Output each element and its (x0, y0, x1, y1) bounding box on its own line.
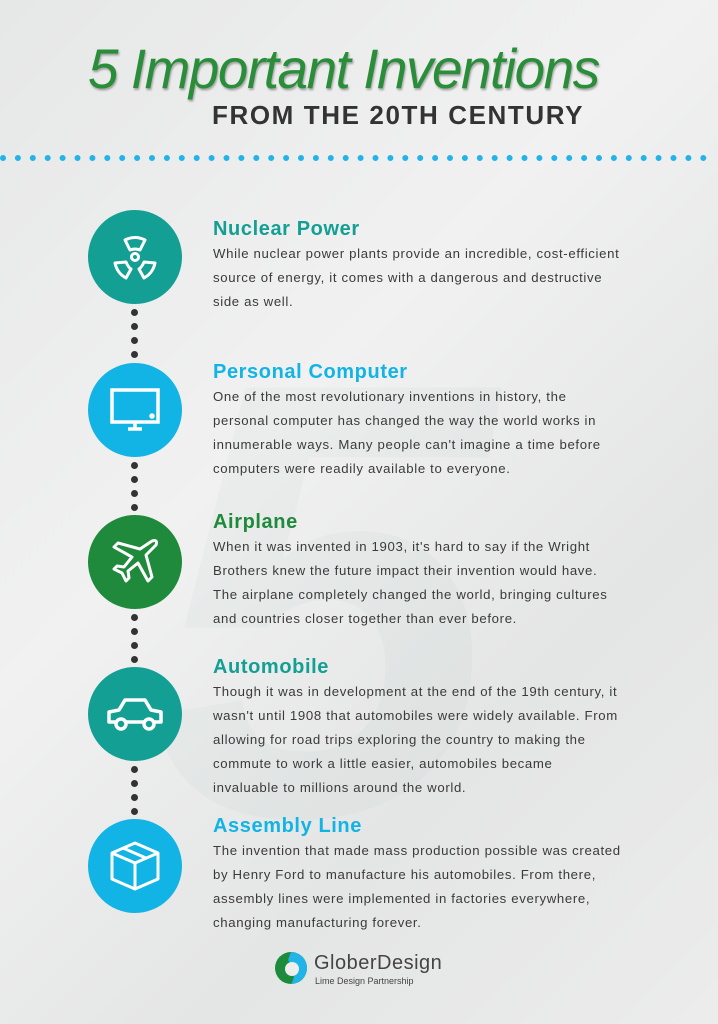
logo: Lime Design Partnership (315, 976, 414, 986)
text: automobile: Though it was in development at the end of the 19th century, it (213, 684, 617, 699)
text: assembly line: The invention that made mass production possible was created (213, 843, 621, 858)
text: airplane (213, 539, 608, 626)
heading: automobile: Automobile (213, 656, 329, 678)
heading: assembly line: Assembly Line (213, 815, 362, 837)
text: automobile: allowing for road trips exploring the country to making the (213, 732, 586, 747)
text: nuclear power: source of energy, it comes with a dangerous and destructive (213, 270, 602, 285)
text: airplane: The airplane completely changed the world, bringing cultures (213, 587, 608, 602)
heading: personal computer: Personal Computer (213, 361, 408, 383)
icon: nuclear (88, 210, 182, 304)
text: personal computer: computers were readily available to everyone. (213, 461, 511, 476)
background big 5: 5 (150, 254, 495, 946)
text: personal computer (213, 389, 601, 476)
text: assembly line: by Henry Ford to manufacture his automobiles. From there, (213, 867, 596, 882)
text: airplane: and countries closer together than ever before. (213, 611, 517, 626)
text: automobile (213, 684, 618, 795)
heading: nuclear power: Nuclear Power (213, 218, 360, 240)
icon: car (88, 667, 182, 761)
connector dots (96, 309, 174, 815)
text: personal computer: personal computer has changed the way the world works in (213, 413, 596, 428)
heading: airplane: Airplane (213, 511, 298, 533)
text: airplane: Brothers knew the future impact their invention would have. (213, 563, 597, 578)
text: automobile: invaluable to millions around the world. (213, 780, 466, 795)
text: assembly line: changing manufacturing forever. (213, 915, 422, 930)
text: nuclear power: side as well. (213, 294, 293, 309)
text: assembly line: assembly lines were implemented in factories everywhere, (213, 891, 590, 906)
icon: computer (88, 363, 182, 457)
title: FROM THE 20TH CENTURY (212, 100, 584, 130)
text: personal computer: One of the most revolutionary inventions in history, the (213, 389, 567, 404)
text: automobile: wasn't until 1908 that automobiles were widely available. From (213, 708, 618, 723)
text: nuclear power: While nuclear power plants provide an incredible, cost-efficient (213, 246, 619, 261)
logo: GloberDesign (314, 952, 442, 974)
text: airplane: When it was invented in 1903, it's hard to say if the Wright (213, 539, 590, 554)
title: 5 Important Inventions (88, 37, 599, 100)
logo (275, 952, 442, 986)
title (88, 37, 600, 130)
text: nuclear power (213, 246, 619, 309)
icon: box (88, 819, 182, 913)
icon: airplane (88, 515, 182, 609)
text: personal computer: innumerable ways. Many people can't imagine a time before (213, 437, 601, 452)
text: assembly line (213, 843, 621, 930)
text: automobile: commute to work a little easier, automobiles became (213, 756, 553, 771)
dotted divider (0, 155, 706, 161)
